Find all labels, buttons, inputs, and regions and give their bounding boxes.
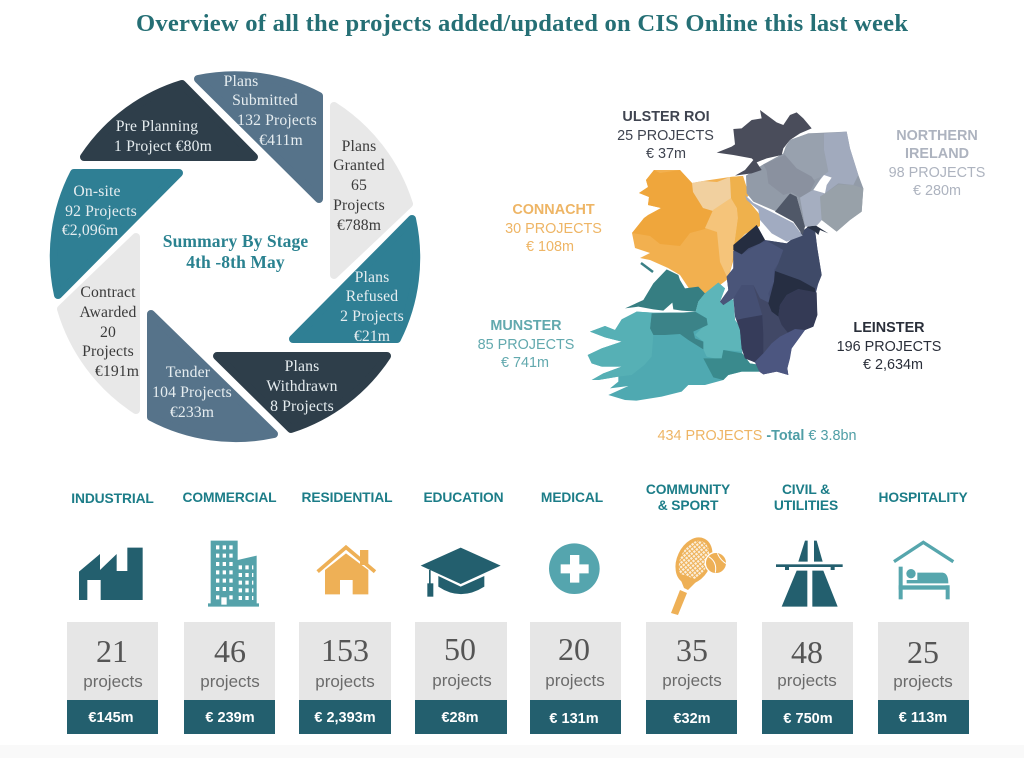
segment: plans refused: Plans	[355, 269, 389, 286]
segment: plans withdrawn	[217, 356, 387, 429]
segment: plans submitted: 132 Projects	[237, 112, 317, 129]
label: Northern Ireland: NORTHERN	[896, 128, 978, 144]
label: Northern Ireland: € 280m	[913, 183, 961, 199]
column: residential: projects	[315, 672, 375, 691]
segment: on-site: 92 Projects	[65, 203, 137, 220]
label: Ulster ROI: ULSTER ROI	[622, 109, 710, 125]
column: education: 50	[444, 631, 476, 667]
icon: medical cross	[549, 543, 600, 594]
map of Ireland by province	[588, 110, 863, 401]
label: Ulster ROI	[617, 109, 714, 162]
column: civil and utilities	[762, 482, 853, 734]
column: industrial: €145m	[88, 710, 134, 726]
column: civil and utilities: € 750m	[783, 711, 833, 727]
column: community and sport: & SPORT	[658, 498, 719, 513]
segment: tender: Tender	[166, 364, 211, 381]
segment: plans withdrawn: 8 Projects	[270, 398, 334, 415]
label: Leinster: LEINSTER	[853, 320, 925, 336]
segment: on-site: €2,096m	[62, 222, 118, 239]
column: education: €28m	[441, 710, 479, 726]
label: Munster: 85 PROJECTS	[478, 337, 574, 353]
segment: plans submitted: €411m	[259, 132, 303, 149]
segment: plans withdrawn: Withdrawn	[266, 378, 338, 395]
label: Leinster: 196 PROJECTS	[837, 339, 941, 355]
column: commercial: 46	[214, 633, 246, 669]
segment: plans granted: Plans	[342, 138, 376, 155]
label: Leinster: € 2,634m	[863, 357, 923, 373]
column: education	[415, 490, 507, 734]
label: Leinster	[837, 320, 941, 373]
column: community and sport: 35	[676, 632, 708, 668]
segment: on-site	[54, 173, 179, 295]
column: residential: € 2,393m	[314, 710, 376, 726]
column: hospitality	[878, 490, 969, 734]
segment: plans granted: Projects	[333, 197, 385, 214]
wheel centre heading: 4th -8th May	[186, 252, 285, 272]
label: Munster: € 741m	[501, 355, 549, 371]
segment: plans granted	[333, 106, 409, 275]
segment: contract awarded: Awarded	[79, 304, 137, 321]
map total: 434 PROJECTS -Total € 3.8bn	[658, 428, 856, 444]
label: Ulster ROI: € 37m	[646, 146, 686, 162]
label: Connacht: CONNACHT	[512, 202, 595, 218]
segment: plans submitted: Submitted	[232, 92, 298, 109]
segment: pre planning: Pre Planning	[116, 118, 198, 135]
column: community and sport	[646, 482, 737, 734]
region: Munster	[588, 269, 760, 401]
column: commercial: projects	[200, 672, 260, 691]
column: industrial	[67, 491, 158, 734]
label: Northern Ireland: 98 PROJECTS	[889, 165, 985, 181]
column: hospitality: projects	[893, 672, 953, 691]
wheel centre heading	[163, 231, 308, 272]
title: Overview of all the projects added/updated on CIS Online this last week	[136, 10, 908, 37]
segment: contract awarded: €191m	[95, 363, 139, 380]
column: education: EDUCATION	[423, 490, 504, 505]
column: medical: projects	[545, 671, 605, 690]
segment: plans refused: 2 Projects	[340, 308, 404, 325]
segment: pre planning: 1 Project €80m	[114, 138, 212, 155]
column: medical: MEDICAL	[541, 490, 603, 505]
segment: plans granted: €788m	[337, 217, 381, 234]
segment: plans refused: Refused	[346, 288, 398, 305]
column: community and sport: projects	[662, 671, 722, 690]
segment: tender	[151, 314, 274, 438]
label: Ulster ROI: 25 PROJECTS	[617, 128, 714, 144]
column: civil and utilities: CIVIL &	[782, 482, 830, 497]
label: Munster	[478, 318, 574, 371]
column: residential: RESIDENTIAL	[302, 490, 392, 505]
segment: plans granted: Granted	[333, 157, 385, 174]
segment: plans refused: €21m	[354, 328, 390, 345]
column: industrial: 21	[96, 633, 128, 669]
column: medical: € 131m	[549, 711, 599, 727]
icon: tennis racket and ball	[671, 534, 727, 615]
column: education: projects	[432, 671, 492, 690]
column: civil and utilities: UTILITIES	[774, 498, 838, 513]
column: civil and utilities: projects	[777, 671, 837, 690]
icon: house	[318, 547, 375, 594]
column: hospitality: HOSPITALITY	[878, 490, 968, 505]
segment: pre planning	[84, 84, 254, 157]
wheel centre heading: Summary By Stage	[163, 231, 308, 251]
segment: contract awarded	[61, 237, 139, 410]
column: residential: 153	[321, 632, 369, 668]
map labels	[478, 109, 985, 444]
column: hospitality: 25	[907, 634, 939, 670]
segment: contract awarded: Contract	[80, 284, 136, 301]
icon: factory	[79, 548, 143, 600]
segment: plans granted: 65	[351, 177, 367, 194]
segment: on-site: On-site	[73, 183, 121, 200]
column: commercial: COMMERCIAL	[182, 490, 277, 505]
icon: office buildings	[208, 541, 259, 607]
column: commercial: € 239m	[205, 710, 255, 726]
segment: plans refused	[293, 219, 416, 345]
column: residential	[299, 490, 392, 734]
icon: bed under roof	[894, 542, 953, 599]
segment: tender: €233m	[170, 404, 214, 421]
segment: contract awarded: 20	[100, 324, 116, 341]
segment: plans submitted: Plans	[224, 73, 258, 90]
region: Connacht	[632, 170, 760, 294]
label: Munster: MUNSTER	[490, 318, 562, 334]
column: commercial	[182, 490, 277, 734]
segment: tender: 104 Projects	[152, 384, 232, 401]
label: Connacht	[505, 202, 602, 255]
column: community and sport: COMMUNITY	[646, 482, 730, 497]
icon: graduation cap	[421, 548, 501, 597]
panel: summary by stage wheel	[54, 73, 416, 438]
segment: plans withdrawn: Plans	[285, 358, 319, 375]
region: Ulster ROI and Northern Ireland	[717, 110, 863, 242]
segment: plans submitted	[198, 73, 319, 199]
label: Northern Ireland: IRELAND	[905, 146, 969, 162]
column: industrial: projects	[83, 672, 143, 691]
icon: motorway and bridge	[776, 541, 843, 607]
column: community and sport: €32m	[673, 711, 711, 727]
label: Connacht: 30 PROJECTS	[505, 221, 602, 237]
region: Leinster	[720, 225, 828, 375]
column: civil and utilities: 48	[791, 634, 823, 670]
label: Connacht: € 108m	[526, 239, 574, 255]
column: industrial: INDUSTRIAL	[71, 491, 154, 506]
column: hospitality: € 113m	[899, 710, 947, 726]
label: Northern Ireland	[889, 128, 985, 199]
column: medical: 20	[558, 631, 590, 667]
column: medical	[530, 490, 621, 734]
segment: contract awarded: Projects	[82, 343, 134, 360]
